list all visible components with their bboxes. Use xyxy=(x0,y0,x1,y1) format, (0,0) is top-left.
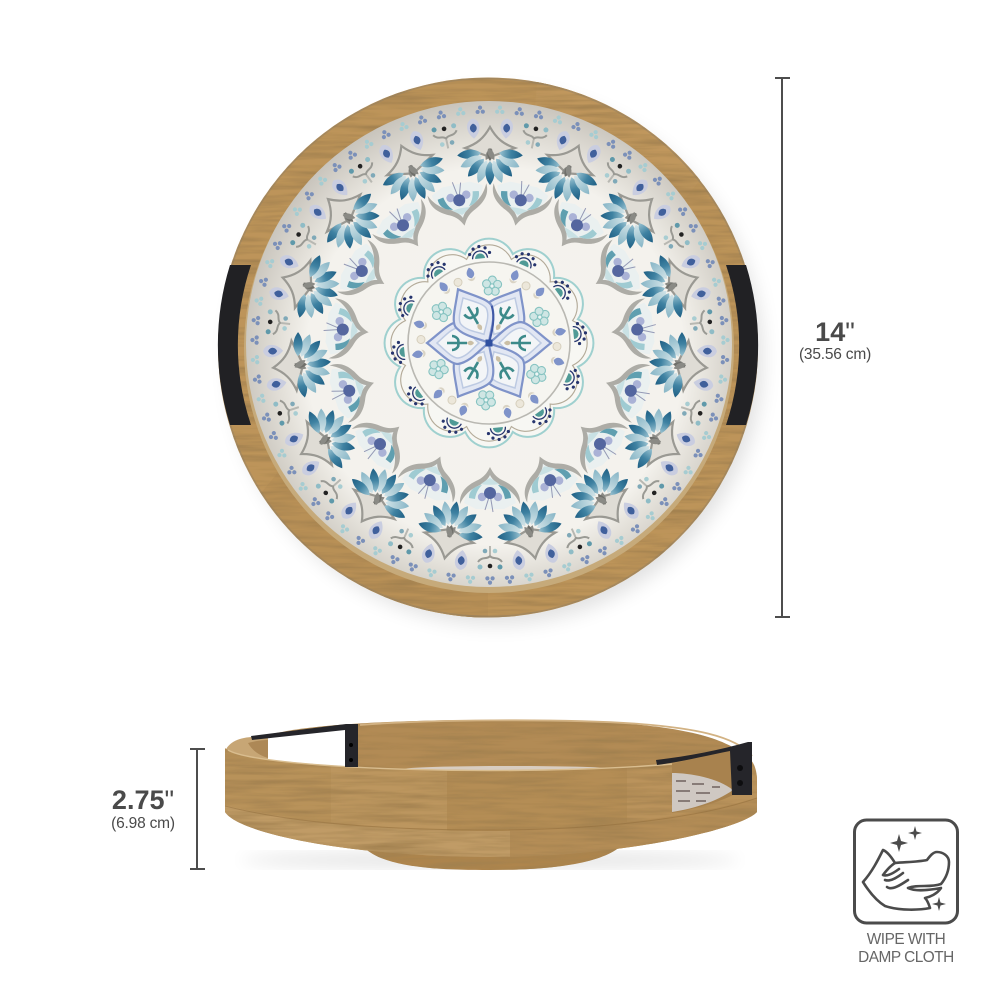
photo: side view of tray xyxy=(220,715,762,870)
central medallion xyxy=(380,239,598,447)
care instruction text: WIPE WITH xyxy=(867,931,945,948)
rim inner wall: left end xyxy=(248,740,268,758)
left opening xyxy=(268,728,346,772)
metal handle: left xyxy=(251,724,358,767)
handle: left xyxy=(218,265,251,425)
wooden rim xyxy=(218,78,758,618)
dimension line: height xyxy=(190,749,205,869)
handle: right xyxy=(726,265,758,425)
foot xyxy=(362,845,622,870)
icon: wipe with damp cloth xyxy=(854,820,958,923)
label: 14 inch diameter xyxy=(799,317,871,363)
label: 14 inch diameter: 14" xyxy=(815,317,855,347)
label: 2.75 inch height: (6.98 cm) xyxy=(111,815,175,832)
ring of fan, arch and eye motifs xyxy=(242,100,735,593)
label: 2.75 inch height: 2.75" xyxy=(112,785,174,815)
icon: cloth and hand xyxy=(863,850,949,910)
plate sliver xyxy=(405,766,615,772)
label: 14 inch diameter: (35.56 cm) xyxy=(799,346,871,363)
back wall xyxy=(248,720,757,790)
right opening with mosaic xyxy=(672,745,748,813)
wood inner bevel xyxy=(244,103,734,593)
metal handle: right xyxy=(656,742,752,795)
care instruction text xyxy=(858,931,954,966)
front band xyxy=(225,748,757,857)
dimension line: diameter xyxy=(775,78,790,617)
icon: sparkles xyxy=(890,826,946,911)
enamel plate xyxy=(246,101,732,587)
rim surface: left end xyxy=(225,737,268,762)
photo: top view of round tray xyxy=(218,78,762,624)
label: 2.75 inch height xyxy=(111,785,175,832)
care instruction text: DAMP CLOTH xyxy=(858,949,954,966)
